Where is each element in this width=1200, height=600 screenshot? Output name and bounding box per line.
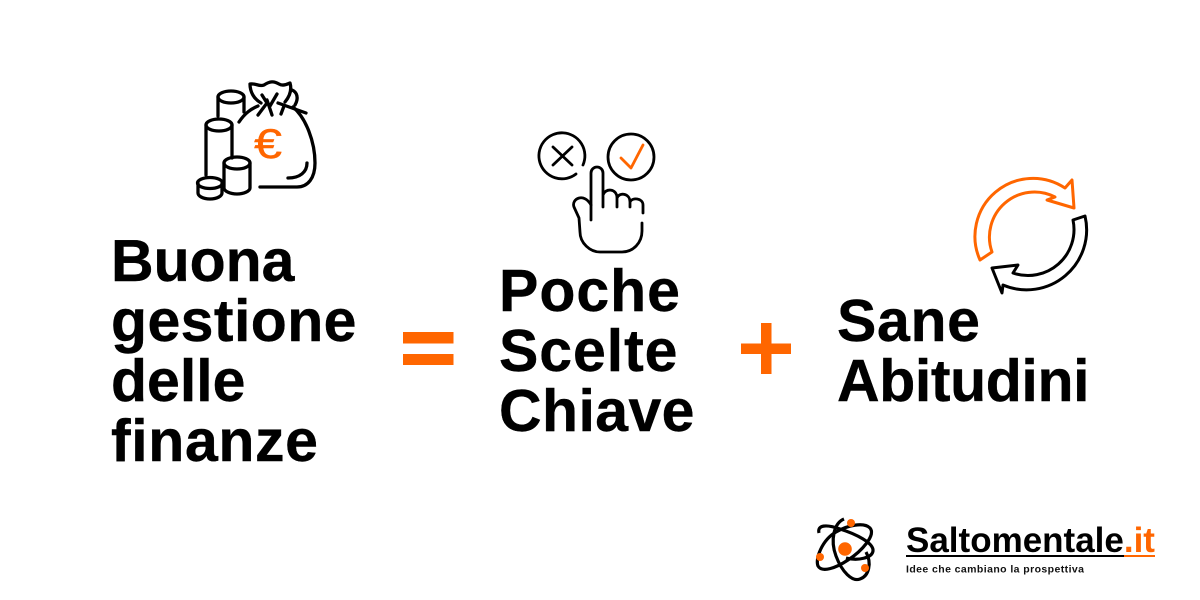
heading: Buona gestione delle finanze: finanze xyxy=(111,408,318,474)
icon: money bag and coins xyxy=(198,82,315,199)
heading: Buona gestione delle finanze xyxy=(111,228,356,474)
heading: Poche Scelte Chiave: Poche xyxy=(499,258,680,324)
equals sign xyxy=(403,332,454,365)
heading: Sane Abitudini xyxy=(837,288,1090,414)
icon: orange cycle arrow xyxy=(975,178,1074,260)
heading: Poche Scelte Chiave xyxy=(499,258,694,444)
plus sign xyxy=(741,323,791,374)
heading: Sane Abitudini: Sane xyxy=(837,288,980,354)
logo wordmark: Saltomentale.it: Saltomentale.it xyxy=(906,521,1155,560)
euro sign: € xyxy=(254,120,282,167)
heading: Sane Abitudini: Abitudini xyxy=(837,348,1090,414)
heading: Buona gestione delle finanze: gestione xyxy=(111,288,356,354)
logo underline xyxy=(906,555,1155,557)
heading: Buona gestione delle finanze: delle xyxy=(111,348,246,414)
icon: black cycle arrow xyxy=(992,216,1087,293)
logo: atom xyxy=(816,519,873,580)
heading: Poche Scelte Chiave: Chiave xyxy=(499,378,694,444)
heading: Buona gestione delle finanze: Buona xyxy=(111,228,296,294)
icon: choice hand with cross and check xyxy=(539,133,654,252)
logo tagline: Idee che cambiano la prospettiva xyxy=(906,564,1084,576)
heading: Poche Scelte Chiave: Scelte xyxy=(499,318,678,384)
